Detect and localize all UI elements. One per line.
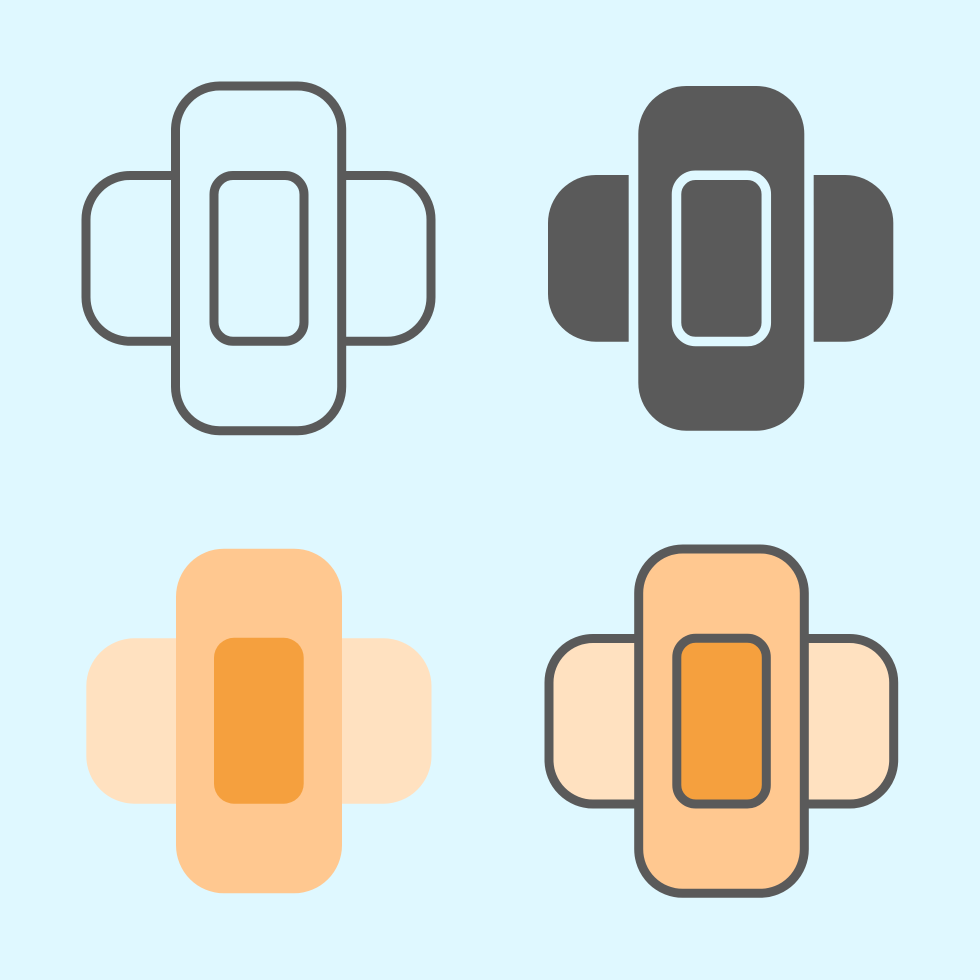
icon: solid bandage bbox=[548, 86, 893, 431]
icon: outline bandage bbox=[86, 86, 431, 431]
icon: flat colour bandage bbox=[86, 549, 432, 893]
icon: colour bandage with outline bbox=[549, 549, 894, 893]
